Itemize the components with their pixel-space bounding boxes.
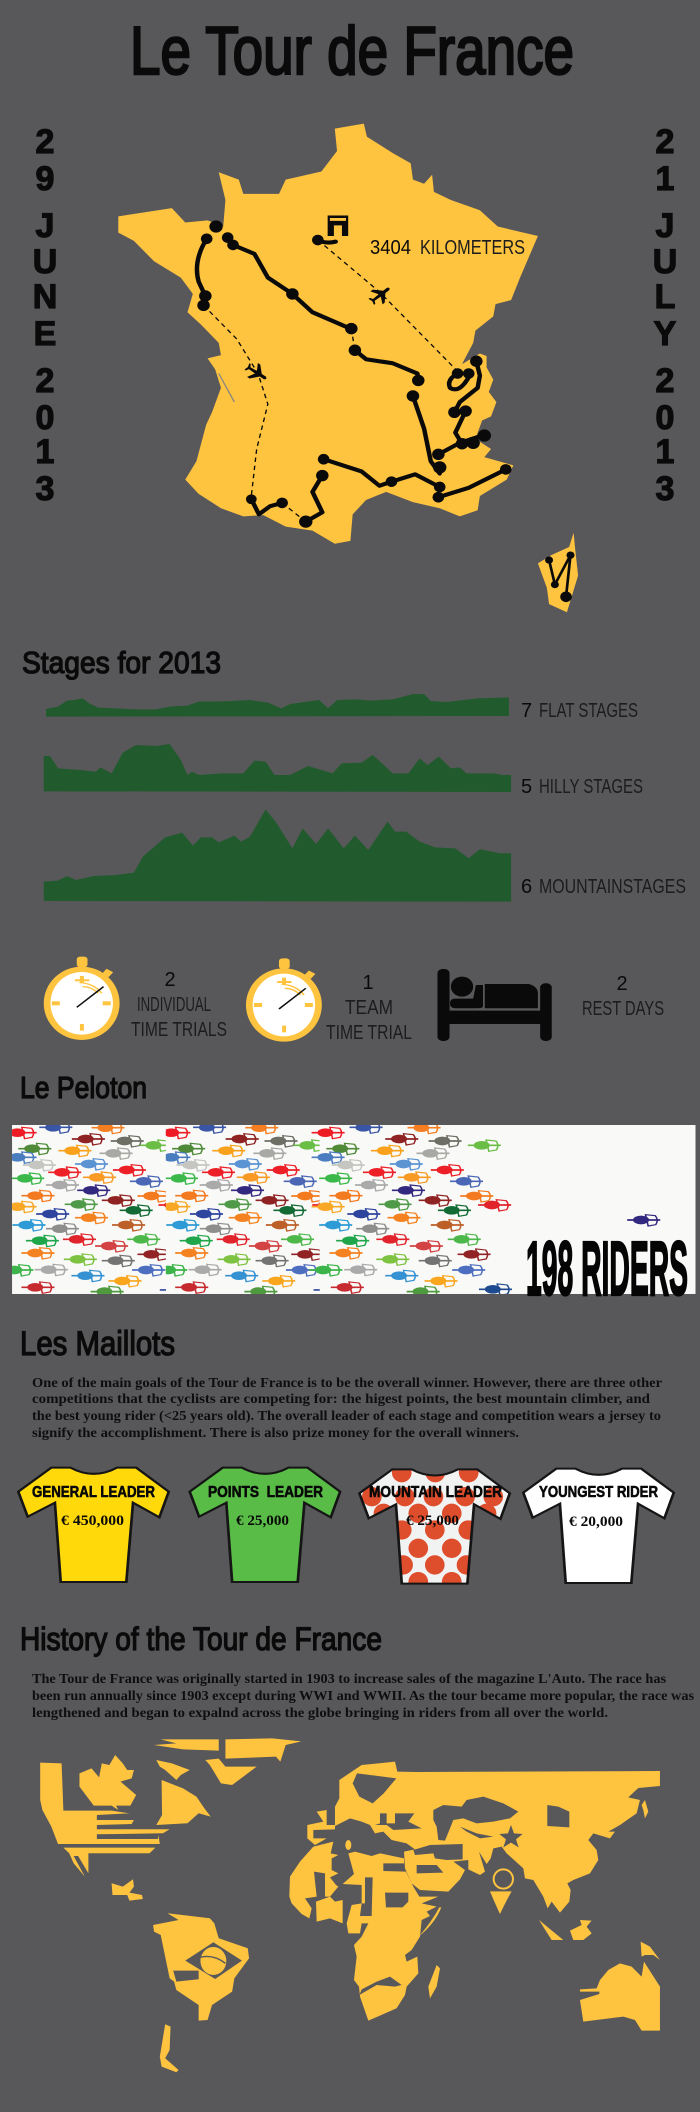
jersey: green points leader	[190, 1468, 340, 1582]
start date column: E	[34, 315, 56, 353]
text block: jerseys intro	[32, 1376, 662, 1441]
world map: Americas	[40, 1738, 301, 2072]
label: team time trial: TEAM	[345, 997, 393, 1019]
Japan	[642, 1800, 648, 1818]
start date column: 3	[36, 470, 54, 508]
distance label: KILOMETERS	[420, 237, 525, 259]
Middle East cuts	[413, 1844, 463, 1873]
Greenland with cross	[154, 1738, 301, 1785]
label: rest days: 2	[616, 973, 628, 995]
label: individual time trials: TIME TRIALS	[131, 1019, 227, 1041]
label: team time trial: 1	[362, 972, 374, 994]
icon: stopwatch team	[246, 958, 322, 1042]
label: team time trial: TIME TRIAL	[326, 1022, 412, 1044]
end date column	[653, 123, 677, 508]
Brazil globe band	[200, 1956, 225, 1963]
South America	[153, 1913, 249, 2021]
Chile	[160, 2024, 179, 2072]
jersey: white youngest rider: € 20,000	[569, 1514, 623, 1530]
start date column: 1	[36, 433, 54, 471]
start date column: J	[36, 207, 54, 245]
end date column: 1	[656, 160, 674, 198]
heading: history: History of the Tour de France	[20, 1621, 382, 1657]
jersey: polka dot mountain leader: € 25,000	[406, 1513, 459, 1529]
title: Le Tour de France	[130, 13, 574, 89]
jersey: green points leader: € 25,000	[236, 1513, 289, 1529]
Brazil flag cut	[173, 1942, 242, 1982]
distance label	[370, 237, 525, 259]
icon: stopwatch individual	[44, 957, 120, 1040]
end date column: 2	[656, 123, 674, 161]
riders pack	[0, 1122, 512, 1298]
distance label: 3404	[370, 237, 411, 259]
text block: history: been run annually since 1903 except during WWI and WWII. As the tour became more popular, the race was	[32, 1689, 695, 1704]
start date column: 9	[36, 160, 54, 198]
label: mountain stages: 6	[521, 876, 532, 898]
map of France with route	[118, 124, 578, 612]
Madagascar	[428, 1965, 440, 1998]
Central America	[112, 1879, 143, 1901]
label: individual time trials	[131, 969, 227, 1041]
end date column: U	[653, 243, 677, 281]
label: flat stages: FLAT STAGES	[539, 700, 638, 722]
Canada east island	[156, 1760, 190, 1780]
Gironde estuary	[219, 374, 234, 402]
label: flat stages	[521, 700, 638, 722]
Africa	[343, 1852, 438, 2021]
text block: jerseys intro: the best young rider (<25 years old). The overall leader of each stage and competition wears a jersey to	[32, 1409, 661, 1424]
text block: jerseys intro: One of the main goals of the Tour de France is to be the overall winner. However, there are three other	[32, 1376, 662, 1391]
world map: Old World	[289, 1762, 660, 2031]
label: hilly stages	[521, 776, 643, 798]
jersey: green points leader: POINTS LEADER	[208, 1484, 323, 1501]
heading: stages: Stages for 2013	[22, 645, 221, 680]
text block: jerseys intro: competitions that the cyclists are competing for: the higest points, the best mountain climber, and	[32, 1392, 650, 1407]
East Africa sliver	[419, 1907, 441, 1936]
text block: history	[32, 1672, 695, 1721]
end date column: 3	[656, 470, 674, 508]
Central Asia cut	[433, 1797, 518, 1841]
elevation profiles	[44, 694, 511, 902]
Eastern Europe cut	[375, 1813, 422, 1830]
USA and Alaska flag shape	[40, 1763, 170, 1844]
China star cut	[499, 1825, 523, 1847]
text block: history: The Tour de France was originally started in 1903 to increase sales of the magazine L'Auto. The race has	[32, 1672, 667, 1687]
label: rest days	[582, 973, 664, 1020]
Africa cuts	[359, 1877, 408, 1995]
France mainland shape	[118, 124, 538, 544]
India ring	[494, 1869, 513, 1889]
Baltic cut	[353, 1773, 396, 1803]
Corsica shape	[538, 533, 578, 612]
icon: bed	[437, 969, 552, 1041]
end date column: 2	[656, 362, 674, 400]
Gulf of Guinea block	[316, 1897, 343, 1923]
jersey: yellow general leader	[18, 1468, 169, 1582]
Eurasia	[335, 1762, 660, 1913]
Mongolia flag cut	[547, 1805, 569, 1827]
start date column: 2	[36, 362, 54, 400]
text block: jerseys intro: signify the accomplishment. There is also prize money for the overall winners.	[32, 1426, 519, 1441]
Sumatra	[539, 1920, 563, 1940]
label: individual time trials: INDIVIDUAL	[137, 994, 211, 1016]
New Guinea	[641, 1942, 660, 1960]
Indonesia	[570, 1920, 592, 1940]
end date column: 1	[656, 433, 674, 471]
lone breakaway rider	[627, 1215, 660, 1226]
mountain stage profile	[44, 809, 511, 902]
start date column: 2	[36, 123, 54, 161]
India tip	[490, 1891, 512, 1914]
panel: peloton	[0, 1122, 695, 1298]
icon: Arc de Triomphe	[328, 216, 348, 236]
start date column: U	[33, 243, 57, 281]
Canada maple leaf	[79, 1755, 136, 1810]
start date column: N	[33, 278, 57, 316]
Sardinia	[345, 1840, 351, 1850]
Australia	[580, 1962, 660, 2031]
label: individual time trials: 2	[164, 969, 176, 991]
Canada Quebec	[156, 1780, 211, 1825]
end date column: 0	[656, 399, 674, 437]
icon: plane north	[365, 282, 395, 308]
end date column: Y	[654, 315, 677, 353]
jersey: polka dot mountain leader	[359, 1463, 510, 1591]
label: team time trial	[326, 972, 412, 1044]
jersey: polka dot mountain leader: MOUNTAIN LEADER	[369, 1484, 502, 1501]
end date column: L	[655, 278, 675, 316]
dashed transfer lines	[204, 240, 460, 522]
label: rest days: REST DAYS	[582, 998, 664, 1020]
West Africa	[289, 1842, 338, 1918]
hilly stage profile	[44, 744, 511, 792]
label: hilly stages: HILLY STAGES	[539, 776, 643, 798]
Brazil flag globe	[200, 1947, 226, 1975]
race route lines	[197, 237, 570, 597]
heading: jerseys: Les Maillots	[20, 1325, 175, 1363]
label: flat stages: 7	[521, 700, 532, 722]
heading: peloton: Le Peloton	[20, 1070, 147, 1105]
Lotus	[473, 1846, 482, 1854]
North-west Africa top	[307, 1810, 335, 1845]
jersey: white youngest rider	[523, 1469, 674, 1583]
label: hilly stages: 5	[521, 776, 532, 798]
icon: plane west	[242, 359, 272, 386]
USA lower stripe and Florida	[63, 1848, 155, 1877]
jersey: yellow general leader: GENERAL LEADER	[32, 1484, 155, 1501]
start date column	[33, 123, 57, 508]
text block: history: lengthened and began to expalnd across the globe bringing in riders from all over the world.	[32, 1706, 608, 1721]
end date column: J	[656, 207, 674, 245]
jersey: yellow general leader: € 450,000	[61, 1513, 124, 1529]
race stage dots	[197, 220, 575, 602]
flat stage profile	[46, 694, 509, 717]
start date column: 0	[36, 399, 54, 437]
jersey: white youngest rider: YOUNGEST RIDER	[539, 1484, 658, 1501]
